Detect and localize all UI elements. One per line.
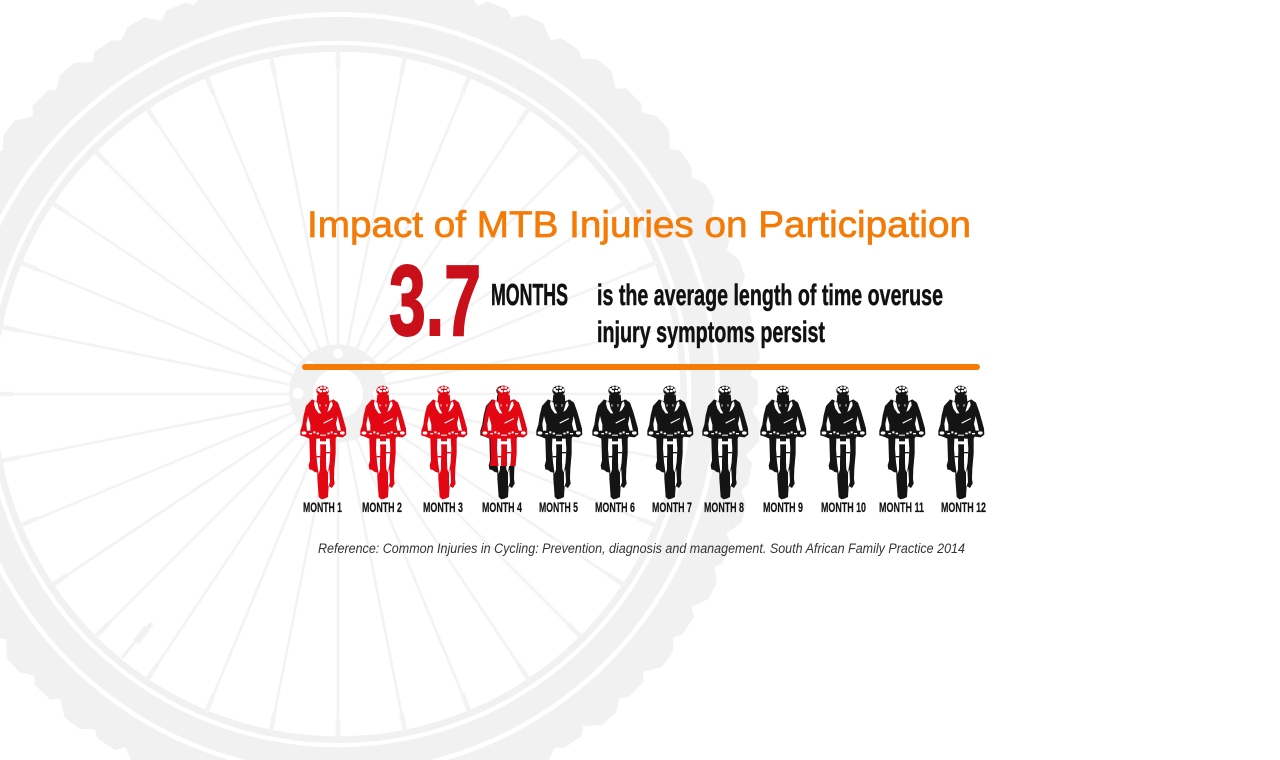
wheel tyre and rim rings: [0, 0, 749, 760]
month 4 rider, part red part black: MONTH 4: [482, 499, 522, 515]
month 1 rider, red: [300, 386, 346, 515]
statistic unit: months: MONTHS: [491, 277, 568, 312]
statistic description: is the average length of time overuse: [597, 279, 943, 312]
month 3 rider, red: [421, 386, 467, 515]
month 7 rider, black: [647, 386, 693, 515]
month 6 rider, black: [592, 386, 638, 515]
wheel tyre knobs: [0, 0, 886, 760]
month 8 rider, black: MONTH 8: [704, 499, 744, 515]
title: Impact of MTB Injuries on Participation: [307, 203, 971, 245]
month 8 rider, black: [702, 386, 748, 515]
month 5 rider, black: MONTH 5: [539, 499, 578, 515]
statistic description: [597, 279, 943, 349]
statistic description: injury symptoms persist: [597, 316, 825, 349]
month 12 rider, black: MONTH 12: [941, 499, 986, 515]
month 9 rider, black: MONTH 9: [763, 499, 803, 515]
month 10 rider, black: MONTH 10: [821, 499, 866, 515]
month 2 rider, red: [360, 386, 406, 515]
wheel spokes: [0, 15, 717, 760]
month 11 rider, black: [879, 386, 925, 515]
big statistic: 3.7: 3.7: [389, 245, 481, 357]
month 10 rider, black: [820, 386, 866, 515]
month 6 rider, black: MONTH 6: [595, 499, 635, 515]
month 4 rider, part red part black: [480, 386, 527, 515]
month 7 rider, black: MONTH 7: [652, 499, 692, 515]
wheel valve: [122, 623, 152, 658]
month 3 rider, red: MONTH 3: [423, 499, 463, 515]
reference note: Reference: Common Injuries in Cycling: Prevention, diagnosis and management. South African Family Practice 2014: [318, 541, 965, 556]
orange divider line: [302, 364, 980, 370]
month 11 rider, black: MONTH 11: [879, 499, 924, 515]
month 5 rider, black: [536, 386, 582, 515]
month 1 rider, red: MONTH 1: [303, 499, 342, 515]
wheel hub: [289, 344, 387, 442]
month 9 rider, black: [760, 386, 806, 515]
background: bicycle wheel: [0, 0, 886, 760]
month 2 rider, red: MONTH 2: [362, 499, 402, 515]
month 12 rider, black: [938, 386, 986, 515]
pictogram row: twelve months of riders: [300, 386, 986, 515]
